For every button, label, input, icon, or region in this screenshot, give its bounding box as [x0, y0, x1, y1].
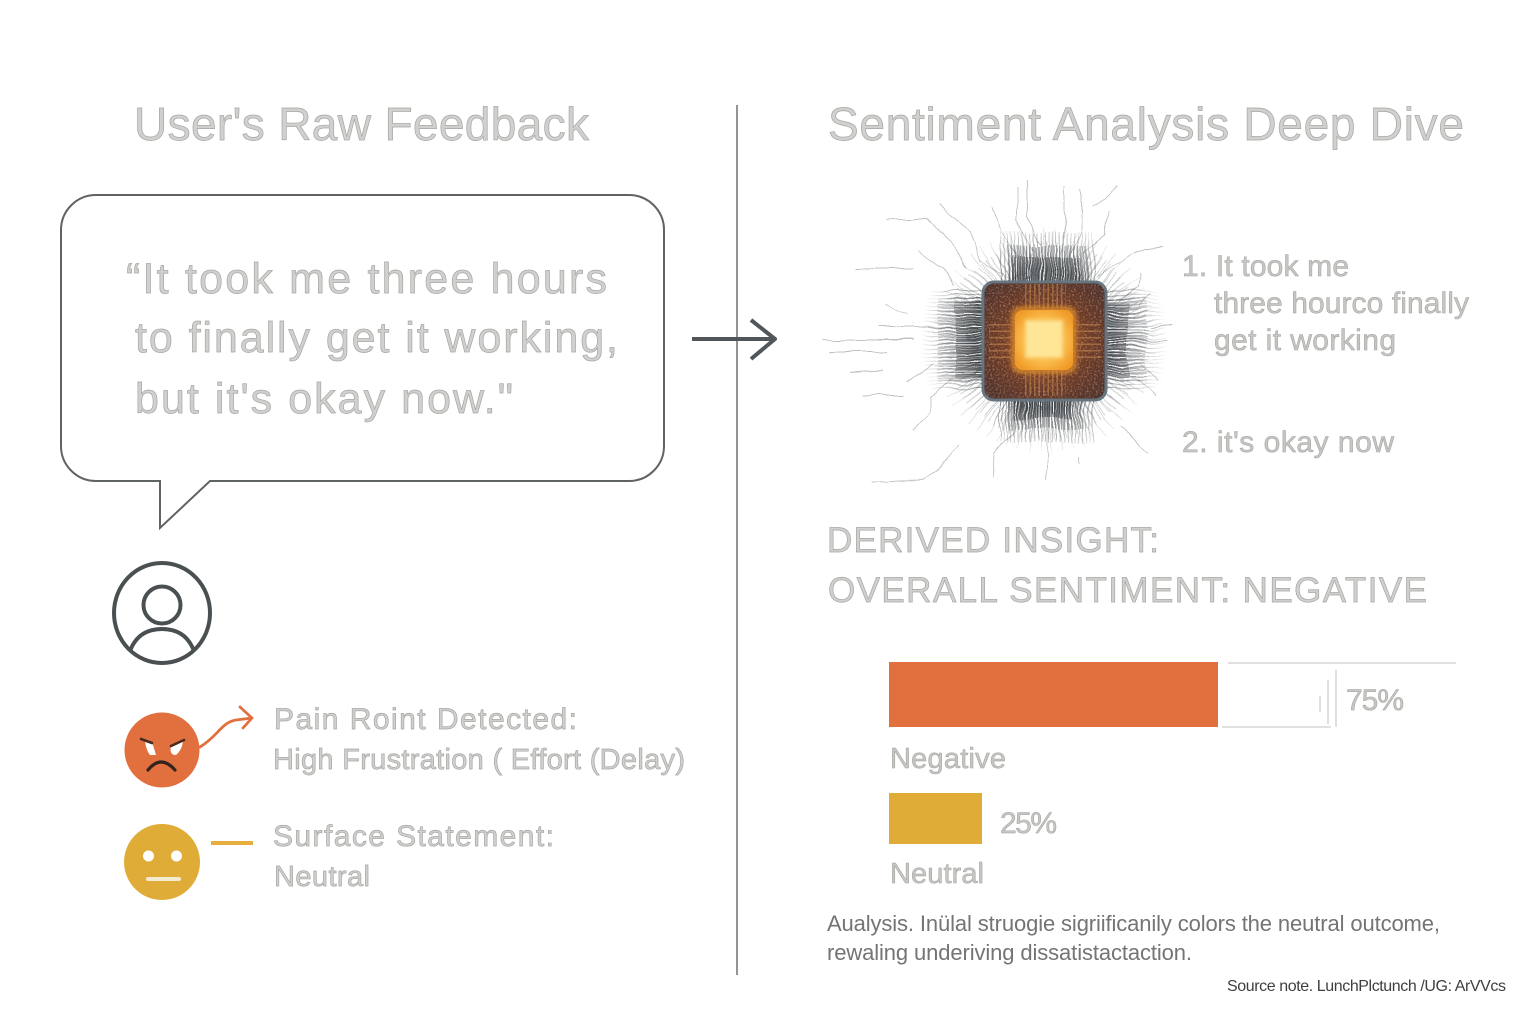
bar: negative 75%: Negative: [890, 743, 1006, 775]
bar: negative 75%: 75%: [1346, 684, 1404, 717]
numbered phrases: 1. It took me: [1182, 250, 1349, 283]
pain point text: High Frustration ( Effort (Delay): [273, 744, 685, 776]
heading: user's raw feedback: User's Raw Feedback: [134, 98, 590, 150]
numbered phrases: 2. it's okay now: [1182, 426, 1394, 459]
panel: user's raw feedback: [61, 98, 685, 900]
analysis text: Aualysis. Inülal struogie sigriificanily colors the neutral outcome,: [827, 911, 1440, 936]
analysis text: [827, 911, 1440, 965]
bar: neutral 25%: Neutral: [890, 858, 984, 890]
arrow: feedback to analysis: [692, 320, 775, 359]
surface statement text: Neutral: [274, 861, 370, 893]
chip body: [983, 282, 1106, 400]
speech bubble with quote: to finally get it working,: [135, 314, 618, 362]
derived insight: OVERALL SENTIMENT: NEGATIVE: [828, 571, 1427, 610]
speech bubble with quote: “It took me three hours: [126, 255, 607, 303]
bar chart: sentiment split: [889, 662, 1456, 890]
bar: negative 75%: [889, 662, 1456, 775]
chip speckle: [985, 284, 1104, 398]
source note: Source note. LunchPlctunch /UG: ArVVcs: [1227, 978, 1506, 995]
bar: neutral 25%: 25%: [1000, 807, 1057, 840]
chip details: [1000, 296, 1089, 384]
icon: angry face with arrow: [124, 707, 252, 788]
derived insight: [827, 521, 1427, 610]
panel divider: [736, 105, 738, 975]
icon: glowing processor chip: [823, 180, 1173, 482]
numbered phrases: [1182, 250, 1469, 459]
derived insight: DERIVED INSIGHT:: [827, 521, 1159, 560]
glowing core: [1011, 306, 1077, 374]
circuit traces: [823, 180, 1173, 482]
pain point text: Pain Roint Detected:: [274, 703, 577, 736]
bar: neutral 25%: [889, 793, 1057, 890]
surface statement text: [273, 820, 554, 893]
numbered phrases: three hourco finally: [1214, 287, 1469, 320]
panel: sentiment analysis: [823, 98, 1506, 995]
speech bubble with quote: [61, 195, 664, 528]
heading: sentiment analysis deep dive: Sentiment Analysis Deep Dive: [828, 98, 1464, 150]
speech bubble with quote: but it's okay now.": [135, 375, 513, 423]
analysis text: rewaling underiving dissatistactaction.: [827, 940, 1192, 965]
surface statement text: Surface Statement:: [273, 820, 554, 853]
radiating pins: [952, 250, 1136, 430]
pain point text: [273, 703, 685, 776]
icon: neutral face with dash: [124, 824, 253, 900]
icon: user avatar: [114, 563, 210, 663]
numbered phrases: get it working: [1214, 324, 1396, 357]
